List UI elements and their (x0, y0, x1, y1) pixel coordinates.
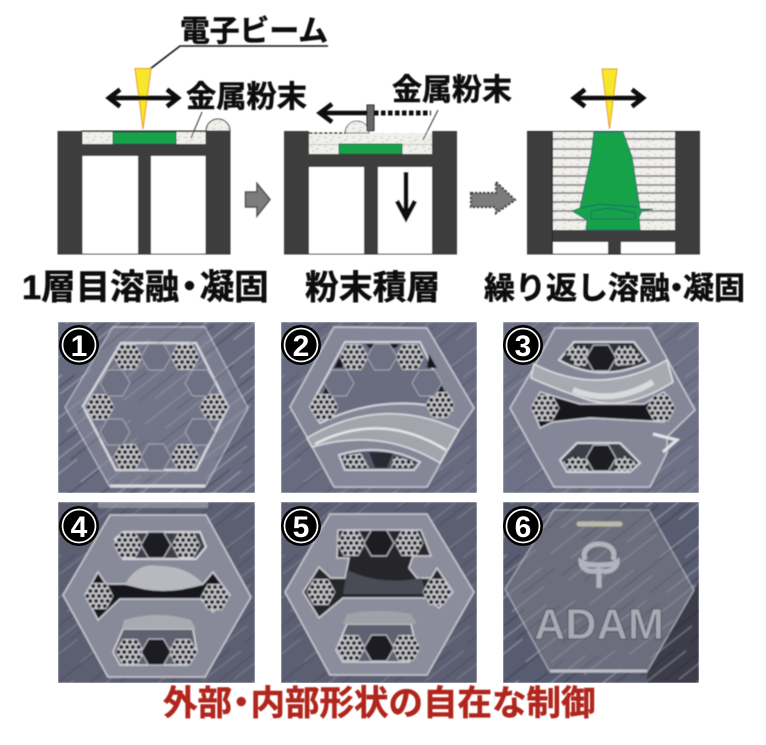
diagram: powder layering (284, 110, 457, 254)
arrow: step 2 to 3 (471, 182, 515, 213)
arrow: build plate down (397, 172, 415, 218)
badge 2: 2 (293, 330, 309, 363)
badge 6 (503, 506, 543, 546)
engraved bar (579, 522, 620, 526)
caption: first layer: 1層目溶融・凝固 (22, 269, 269, 307)
diagrams and labels (22, 15, 745, 307)
badge 4: 4 (71, 511, 88, 544)
label: electron beam: 電子ビーム (180, 15, 328, 48)
engraved logo (581, 544, 617, 588)
photo 5 (281, 502, 477, 683)
icon: electron beam 3 (602, 69, 617, 129)
badge 3: 3 (515, 330, 531, 363)
arrow: beam scan 3 (574, 90, 643, 106)
arrow: recoater movement (320, 104, 431, 131)
arrow: beam scan 1 (109, 90, 178, 106)
diagram: repeated melting (527, 131, 700, 254)
photo 1 (58, 322, 255, 493)
badge 4 (59, 506, 99, 546)
label: metal powder 1: 金属粉末 (186, 81, 307, 114)
powder mound (206, 119, 230, 131)
caption: powder layering: 粉末積層 (305, 269, 440, 307)
badge 6: 6 (515, 511, 531, 544)
badge 3 (503, 325, 543, 365)
melted green layer (113, 132, 176, 144)
engraved word: ADAM (534, 600, 664, 649)
photo 6 (503, 502, 699, 683)
green turbine blade (572, 132, 653, 230)
badge 5: 5 (293, 511, 309, 544)
icon: electron beam 1 (135, 68, 151, 129)
caption: repeated melting: 繰り返し溶融・凝固 (484, 271, 745, 306)
powder mound (345, 121, 369, 133)
bottom caption: 外部・内部形状の自在な制御 (163, 685, 596, 723)
badge 1: 1 (71, 330, 87, 363)
label: metal powder 2: 金属粉末 (392, 74, 512, 107)
photo 2 (281, 322, 477, 493)
badge 1 (59, 325, 99, 365)
photo 4 (58, 502, 255, 683)
badge 2 (281, 325, 321, 365)
label: electron beam (150, 15, 328, 69)
diagram: first layer melting (58, 112, 230, 254)
badge 5 (281, 506, 321, 546)
photo 3 (503, 322, 699, 493)
arrow: step 1 to 2 (246, 184, 270, 216)
